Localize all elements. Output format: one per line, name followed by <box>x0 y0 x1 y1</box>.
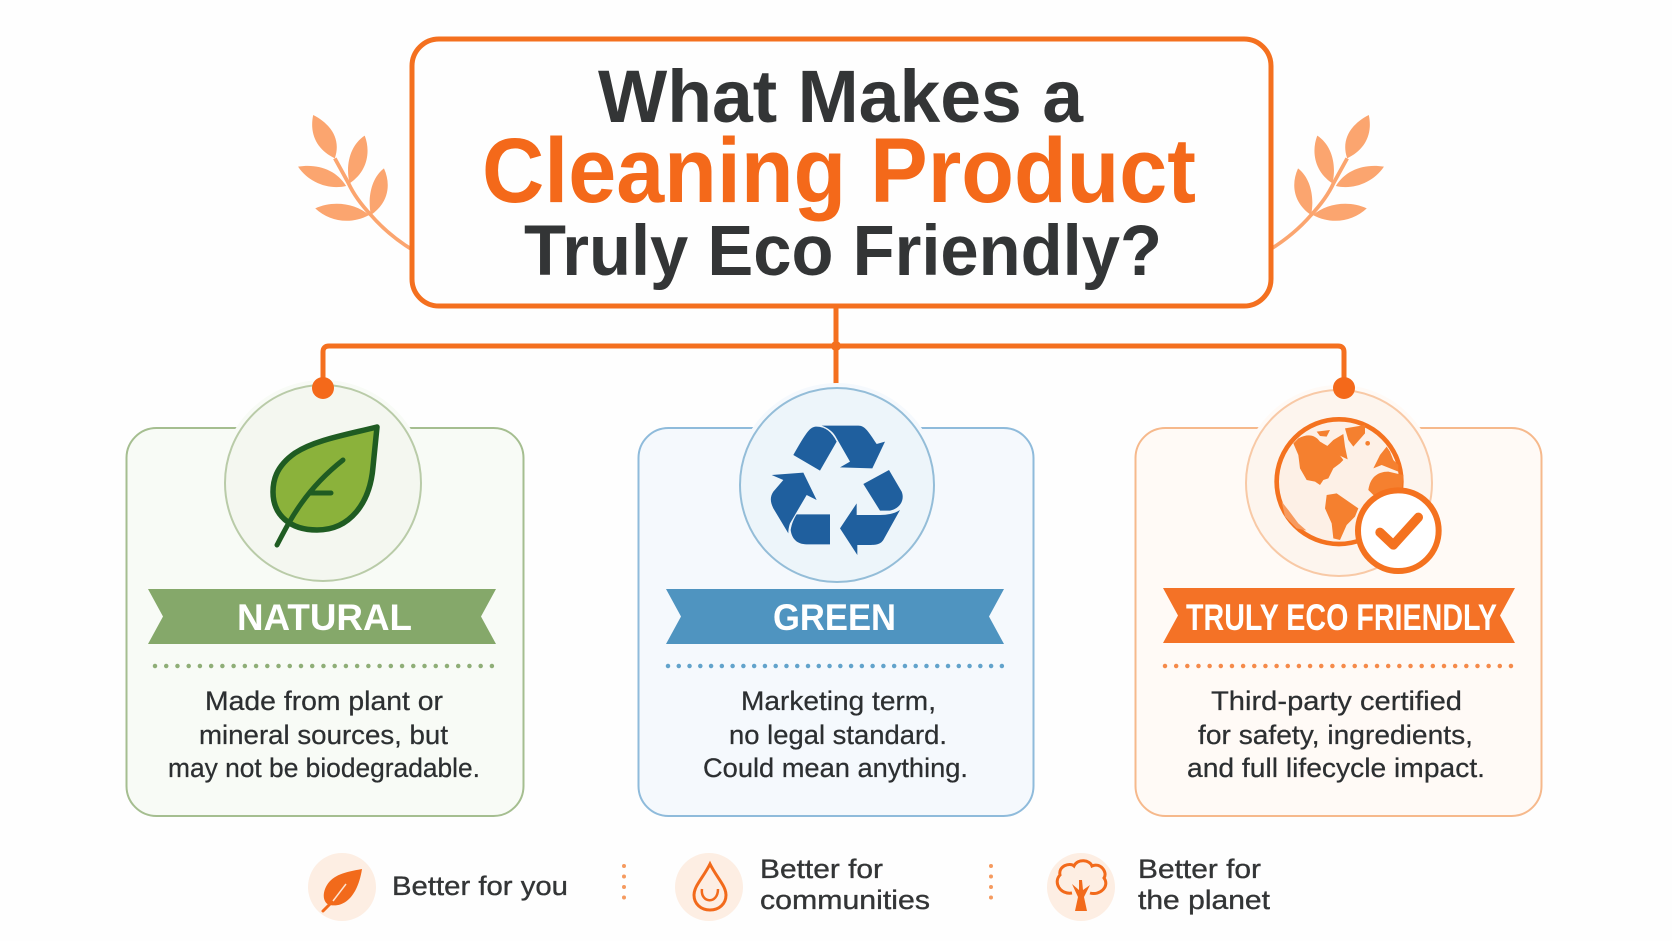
description: green: Marketing term, <box>741 686 936 716</box>
description: green: Could mean anything. <box>703 753 968 783</box>
description: truly eco friendly <box>1187 686 1485 783</box>
description: natural <box>168 686 480 783</box>
title line 3: Truly Eco Friendly? <box>524 212 1162 291</box>
ribbon: green <box>666 589 1004 644</box>
benefit: better for the planet: the planet <box>1138 885 1271 915</box>
title line 1: What Makes a <box>598 55 1084 138</box>
description: natural: mineral sources, but <box>199 720 449 750</box>
description: truly eco friendly: for safety, ingredients, <box>1198 720 1473 750</box>
benefit: better for the planet <box>1047 853 1271 921</box>
icon: green leaf <box>273 427 377 545</box>
dotted divider <box>155 664 492 668</box>
benefit: better for communities <box>675 853 930 921</box>
laurel: right branch <box>1268 115 1384 251</box>
description: natural: may not be biodegradable. <box>168 753 480 783</box>
icon: globe with check badge <box>1277 419 1439 571</box>
benefit: better for the planet: Better for <box>1138 854 1261 884</box>
laurel: left branch <box>298 115 414 251</box>
description: truly eco friendly: Third-party certified <box>1211 686 1462 716</box>
divider dots <box>622 866 626 908</box>
description: natural: Made from plant or <box>205 686 443 716</box>
description: green: no legal standard. <box>729 720 947 750</box>
benefit: better for communities: communities <box>760 885 930 915</box>
description: truly eco friendly: and full lifecycle impact. <box>1187 753 1485 783</box>
benefit: better for communities: Better for <box>760 854 883 884</box>
ribbon: truly eco friendly <box>1163 588 1515 643</box>
dotted divider <box>668 664 1002 668</box>
ribbon: truly eco friendly: TRULY ECO FRIENDLY <box>1186 597 1497 638</box>
dotted divider <box>1165 664 1511 668</box>
connector dot: truly eco friendly <box>1333 377 1355 399</box>
benefit: better for you: Better for you <box>392 871 568 901</box>
icon: tree <box>1057 861 1106 911</box>
icon: water drop <box>694 864 726 910</box>
panel: truly eco friendly <box>1136 377 1542 816</box>
title line 2: Cleaning Product <box>482 120 1196 222</box>
icon: small leaf <box>323 869 362 911</box>
title box <box>412 39 1271 306</box>
benefit: better for you <box>308 853 568 921</box>
panel: green <box>638 383 1034 816</box>
connector lines <box>323 306 1344 388</box>
ribbon: natural <box>148 589 496 644</box>
panel: natural <box>126 377 524 816</box>
divider dots <box>989 866 993 908</box>
ribbon: green: GREEN <box>773 597 896 638</box>
ribbon: natural: NATURAL <box>237 597 412 638</box>
connector dot: natural <box>312 377 334 399</box>
description: green <box>703 686 968 783</box>
icon: recycle arrows <box>771 426 903 555</box>
